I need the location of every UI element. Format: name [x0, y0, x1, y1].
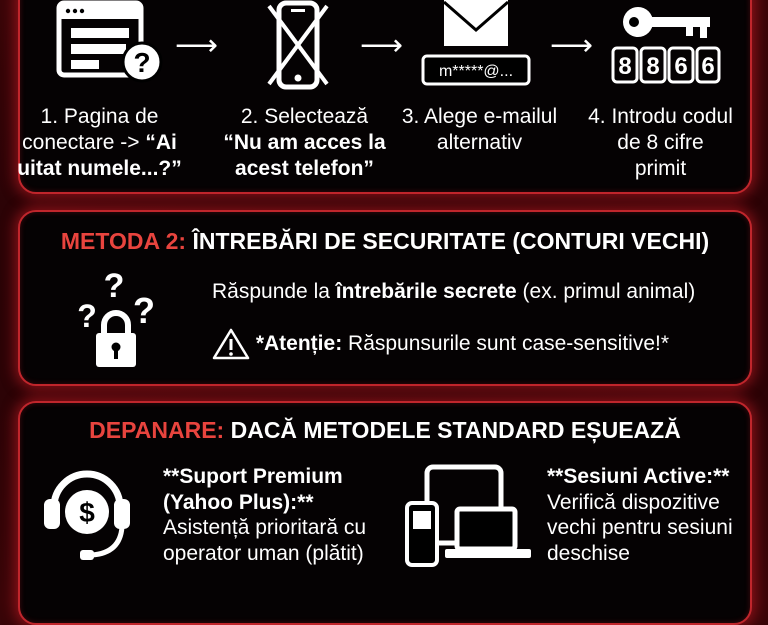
text: sesiuni active — [547, 465, 733, 564]
icon: login page with question — [56, 0, 160, 80]
icon: headset dollar: $ — [79, 497, 95, 528]
icon: key with code: 8 — [618, 53, 632, 80]
warning: *Atenție: — [256, 332, 342, 355]
text step 1 — [17, 105, 182, 180]
text step 2: 2. Selectează — [241, 105, 368, 128]
text: sesiuni active: vechi pentru sesiuni — [547, 516, 733, 539]
text step 2: “Nu am acces la — [223, 131, 386, 154]
text step 2: acest telefon” — [235, 157, 374, 180]
icon: crossed phone — [268, 0, 328, 90]
warning — [212, 328, 669, 360]
arrow 3: ⟶ — [550, 29, 593, 62]
text: suport premium: **Suport Premium — [163, 465, 343, 488]
text step 1: uitat numele...?” — [17, 157, 182, 180]
icon: lock with questions: ? — [104, 267, 124, 305]
arrow 2: ⟶ — [360, 29, 403, 62]
arrow 1: ⟶ — [175, 29, 218, 62]
text: answer: Răspunde la întrebările secrete (ex. primul animal) — [212, 280, 695, 303]
heading: DEPANARE: DACĂ METODELE STANDARD EȘUEAZĂ — [89, 417, 681, 443]
icon: email: m*****@... — [439, 63, 513, 80]
text: sesiuni active: **Sesiuni Active:** — [547, 465, 729, 488]
text step 4: primit — [635, 157, 686, 180]
text step 4 — [588, 105, 733, 180]
text: suport premium — [163, 465, 366, 564]
icon: headset dollar — [44, 470, 130, 560]
icon: login page with question: ? — [133, 47, 151, 78]
warning: Răspunsurile sunt case-sensitive!* — [348, 332, 669, 355]
icon: lock with questions: ? — [77, 298, 97, 334]
text step 4: de 8 cifre — [617, 131, 704, 154]
text step 1: 1. Pagina de — [41, 105, 158, 128]
text: sesiuni active: deschise — [547, 542, 630, 564]
icon: lock with questions — [77, 267, 155, 367]
text: suport premium: operator uman (plătit) — [163, 542, 364, 564]
icon: devices — [405, 464, 531, 567]
text step 1: conectare -> “Ai — [22, 131, 177, 154]
text: sesiuni active: Verifică dispozitive — [547, 490, 720, 514]
icon: key with code — [612, 7, 720, 84]
icon: key with code: 6 — [674, 53, 688, 80]
text: suport premium: (Yahoo Plus):** — [163, 490, 314, 514]
text step 2 — [223, 105, 386, 180]
panel: depanare — [18, 401, 752, 625]
text step 3 — [402, 105, 557, 154]
text step 3: alternativ — [437, 131, 522, 154]
text: suport premium: Asistență prioritară cu — [163, 516, 366, 539]
text step 4: 4. Introdu codul — [588, 105, 733, 128]
panel: metoda 1 steps — [18, 0, 752, 194]
panel: metoda 2 — [18, 210, 752, 386]
icon: key with code: 6 — [701, 53, 715, 80]
text step 3: 3. Alege e-mailul — [402, 105, 557, 128]
icon: lock with questions: ? — [133, 290, 155, 331]
icon: key with code: 8 — [646, 53, 660, 80]
icon: email — [422, 0, 530, 86]
heading: METODA 2: ÎNTREBĂRI DE SECURITATE (CONTURI VECHI) — [61, 228, 709, 254]
